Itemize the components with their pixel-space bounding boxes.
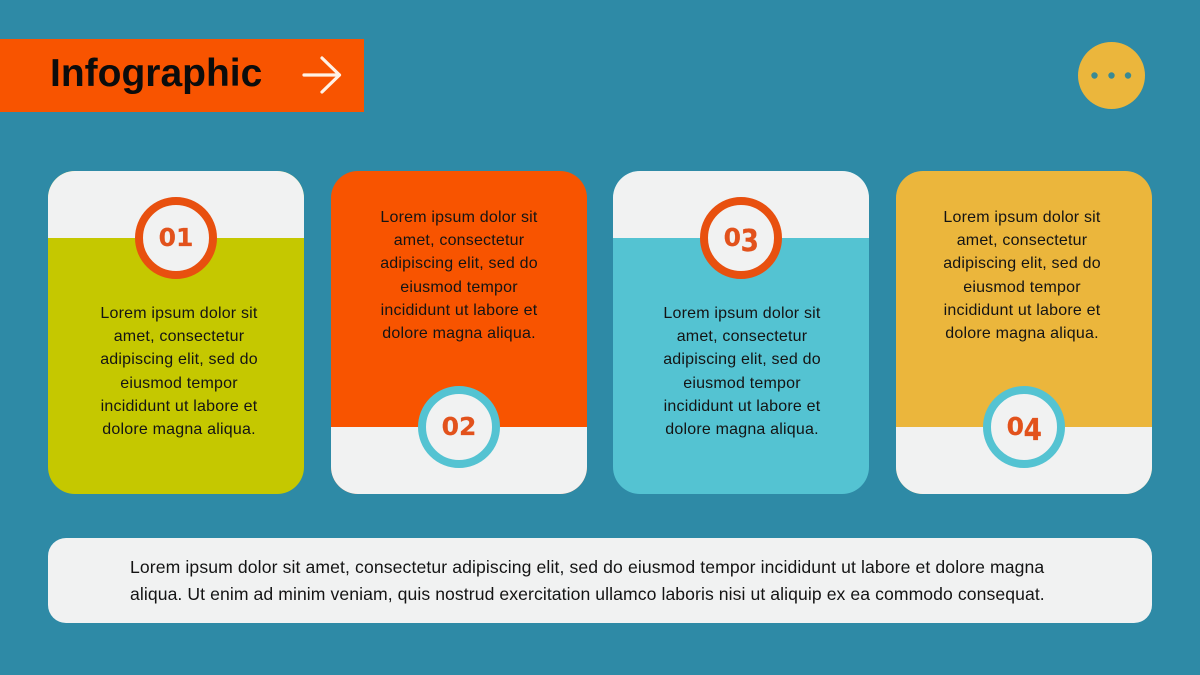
bottom paragraph bbox=[130, 557, 1045, 604]
badge: 01: 01 bbox=[159, 223, 193, 252]
bottom paragraph: aliqua. Ut enim ad minim veniam, quis nostrud exercitation ullamco laboris nisi ut aliquip ex ea commodo consequat. bbox=[130, 584, 1045, 604]
card 01 text: amet, consectetur bbox=[114, 328, 244, 345]
card 04 text bbox=[943, 209, 1101, 342]
icon: menu dots circle bbox=[1078, 42, 1145, 109]
card 04 text: incididunt ut labore et bbox=[944, 302, 1100, 319]
card 01 text: dolore magna aliqua. bbox=[102, 421, 256, 438]
card 01 text: incididunt ut labore et bbox=[101, 398, 257, 415]
badge: 03: 3 bbox=[741, 222, 759, 258]
title: Infographic bbox=[50, 52, 262, 95]
badge: 02: 02 bbox=[442, 412, 476, 441]
card 04 text: Lorem ipsum dolor sit bbox=[943, 209, 1101, 226]
card 02 text: dolore magna aliqua. bbox=[382, 325, 536, 342]
card 01 text bbox=[100, 305, 258, 438]
card 04 text: dolore magna aliqua. bbox=[945, 325, 1099, 342]
panel: card 02 bbox=[331, 171, 587, 494]
panel: card 01 bbox=[48, 171, 304, 494]
card 04 text: adipiscing elit, sed do bbox=[943, 255, 1101, 272]
card 01 text: eiusmod tempor bbox=[120, 375, 238, 392]
card 03 text: amet, consectetur bbox=[677, 328, 807, 345]
card 03 text bbox=[663, 305, 821, 438]
panel: card 03 bbox=[613, 171, 869, 494]
card 03 text: adipiscing elit, sed do bbox=[663, 351, 821, 368]
badge: 04: 0 bbox=[1007, 412, 1024, 441]
badge: 04: 4 bbox=[1024, 411, 1042, 447]
icon: arrow bbox=[302, 56, 342, 94]
card 02 text: adipiscing elit, sed do bbox=[380, 255, 538, 272]
card 03 text: Lorem ipsum dolor sit bbox=[663, 305, 821, 322]
card 03 text: incididunt ut labore et bbox=[664, 398, 820, 415]
badge: 03 bbox=[700, 197, 782, 279]
title banner bbox=[0, 39, 364, 112]
card 03 text: dolore magna aliqua. bbox=[665, 421, 819, 438]
panel: card 04 bbox=[896, 171, 1152, 494]
bottom paragraph: Lorem ipsum dolor sit amet, consectetur adipiscing elit, sed do eiusmod tempor incididunt ut labore et dolore magna bbox=[130, 557, 1044, 577]
card 04 text: eiusmod tempor bbox=[963, 279, 1081, 296]
badge: 01 bbox=[135, 197, 217, 279]
badge: 03: 0 bbox=[724, 223, 741, 252]
card 02 text: Lorem ipsum dolor sit bbox=[380, 209, 538, 226]
card 01 text: adipiscing elit, sed do bbox=[100, 351, 258, 368]
badge: 04 bbox=[983, 386, 1065, 468]
card 02 text: incididunt ut labore et bbox=[381, 302, 537, 319]
card 04 text: amet, consectetur bbox=[957, 232, 1087, 249]
panel: bottom text bbox=[48, 538, 1152, 623]
card 03 text: eiusmod tempor bbox=[683, 375, 801, 392]
card 02 text: eiusmod tempor bbox=[400, 279, 518, 296]
badge: 02 bbox=[418, 386, 500, 468]
card 02 text: amet, consectetur bbox=[394, 232, 524, 249]
card 02 text bbox=[380, 209, 538, 342]
card 01 text: Lorem ipsum dolor sit bbox=[100, 305, 258, 322]
